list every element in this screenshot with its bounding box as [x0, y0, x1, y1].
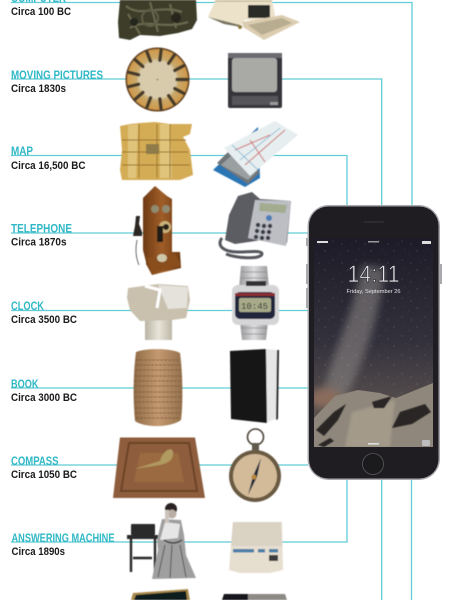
status bar: [317, 241, 431, 244]
label: clock: CLOCK: [11, 301, 45, 313]
phone body: [306, 205, 442, 480]
label: telephone: Circa 1870s: [11, 236, 66, 248]
icon: ancient spoon compass: [113, 438, 205, 498]
icon: digital wristwatch: [232, 266, 279, 340]
icon: stone sundial column: [127, 284, 190, 340]
star field: [314, 238, 433, 398]
icon: digital wristwatch: 10:45: [241, 302, 268, 312]
row: bottom cut-off objects: [131, 589, 287, 600]
label: map: [11, 146, 86, 172]
icon: folded road maps: [213, 121, 298, 187]
label: answering machine: [12, 533, 115, 558]
icon: office desk phone: [220, 192, 291, 258]
home button: [362, 454, 384, 474]
label: moving pictures: Circa 1830s: [11, 83, 66, 95]
label: book: BOOK: [11, 379, 39, 391]
row: computer: [11, 0, 300, 40]
label: answering machine: Circa 1890s: [12, 546, 65, 558]
icon: woman with phonograph: [127, 503, 196, 579]
icon: vintage desktop computer: [208, 0, 300, 40]
camera icon: [422, 440, 430, 446]
label: telephone: TELEPHONE: [11, 224, 72, 236]
row: clock: [11, 266, 279, 340]
row: answering machine: [12, 503, 283, 579]
row: telephone: [11, 186, 291, 275]
label: compass: Circa 1050 BC: [11, 469, 77, 481]
row: compass: [11, 429, 281, 502]
row: moving pictures: [11, 48, 282, 112]
label: moving pictures: [11, 70, 103, 95]
label: map: MAP: [11, 146, 33, 158]
icon: dark framed object: [131, 589, 190, 600]
row: map: [11, 121, 298, 187]
label: clock: [11, 301, 77, 326]
milky way glow: [322, 265, 385, 405]
icon: pocket compass: [229, 429, 281, 502]
horizon glow: [309, 388, 341, 408]
row: book: [11, 349, 279, 426]
label: moving pictures: MOVING PICTURES: [11, 70, 103, 82]
earpiece: [364, 221, 384, 223]
icon: phenakistoscope disc: [126, 48, 190, 112]
icon: modern device: [222, 594, 287, 600]
icon: ancient papyrus map: [120, 122, 193, 180]
label: map: Circa 16,500 BC: [11, 160, 86, 172]
label: compass: COMPASS: [11, 456, 59, 468]
label: computer: [11, 0, 71, 18]
icon: black hardcover book: [230, 349, 279, 423]
label: book: [11, 379, 77, 404]
icon: antikythera mechanism: [118, 0, 197, 40]
label: telephone: [11, 224, 72, 248]
icon: cuneiform tablet: [134, 349, 182, 426]
label: compass: [11, 456, 77, 481]
icon: antique wall telephone: [133, 186, 181, 275]
label: answering machine: ANSWERING MACHINE: [12, 533, 115, 545]
smartphone: [306, 205, 442, 480]
phone screen: [309, 238, 433, 447]
lock screen date: Friday, September 26: [346, 289, 400, 295]
lock screen time: 14:11: [348, 261, 400, 288]
label: computer: Circa 100 BC: [11, 6, 71, 18]
icon: answering machine device: [229, 522, 283, 573]
icon: television: [228, 53, 282, 108]
snowy mountain: [314, 383, 433, 447]
label: book: Circa 3000 BC: [11, 392, 77, 404]
label: clock: Circa 3500 BC: [11, 314, 77, 326]
